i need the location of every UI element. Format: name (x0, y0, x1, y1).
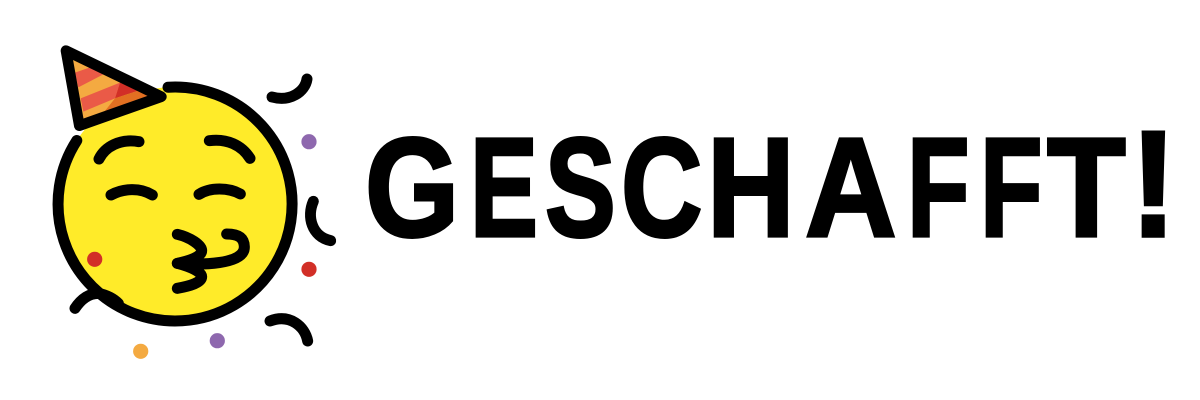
title: A (805, 108, 896, 266)
streamer: bottom right (270, 319, 308, 341)
title: H (707, 108, 794, 266)
confetti dots (87, 134, 317, 359)
kiss curl (177, 234, 244, 264)
face features (75, 140, 331, 341)
streamer: right (311, 201, 331, 241)
face outline (58, 87, 292, 321)
eyebrows (99, 140, 250, 159)
title: C (621, 108, 703, 266)
title: E (470, 108, 538, 266)
closed eyes (111, 189, 240, 195)
streamer: bottom left (75, 293, 118, 308)
title: S (545, 108, 615, 266)
title: F (980, 108, 1042, 266)
title: G (365, 108, 459, 266)
title (365, 99, 1177, 268)
title: F (907, 108, 969, 266)
title: T (1047, 108, 1126, 266)
streamer: top right (272, 79, 307, 98)
title: ! (1130, 99, 1177, 268)
kissing lips (177, 234, 202, 288)
face fill (58, 87, 292, 321)
icon: party hat (66, 51, 161, 126)
